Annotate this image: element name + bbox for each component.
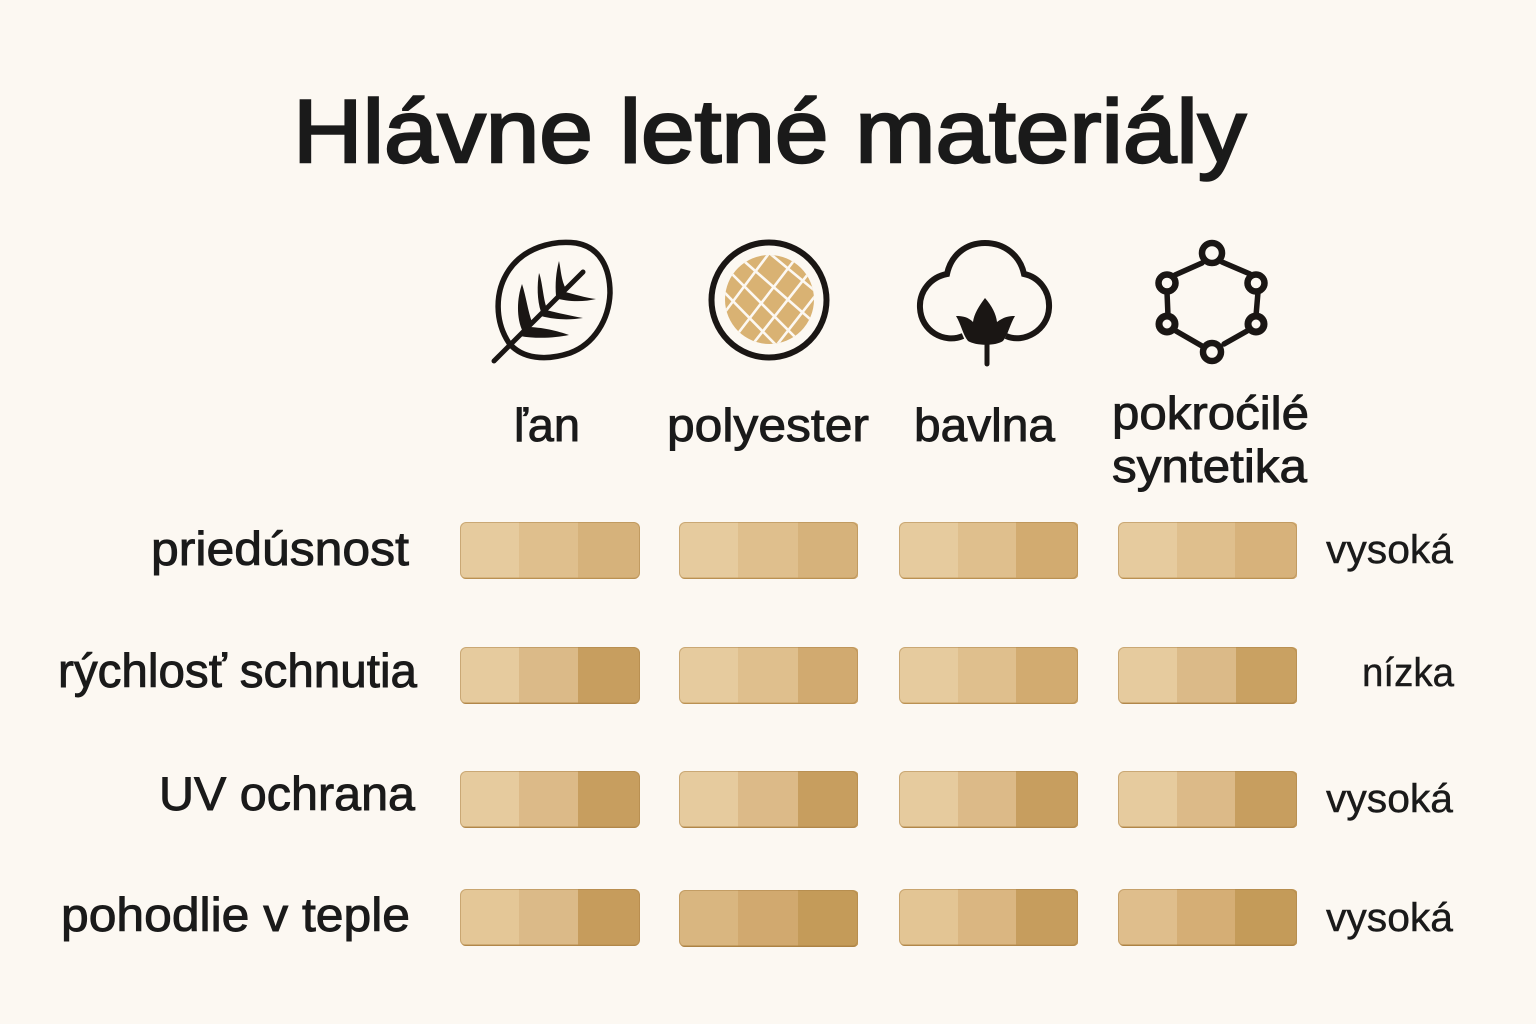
bar: bavlna rýchlosť schnutia <box>899 647 1078 704</box>
bar: bavlna UV ochrana <box>899 771 1078 828</box>
icon: linen leaf <box>494 242 610 361</box>
bar: ľan UV ochrana <box>460 771 640 828</box>
icon: cotton <box>920 243 1049 364</box>
column label: pokročilé syntetika: pokroćilé <box>1112 387 1309 439</box>
column label: polyester: polyester <box>667 399 869 451</box>
column label: bavlna: bavlna <box>914 399 1055 451</box>
bar: polyester UV ochrana <box>679 771 858 828</box>
value label: vysoká: vysoká <box>1326 528 1454 572</box>
column label: ľan: ľan <box>514 399 580 451</box>
row label: UV ochrana: UV ochrana <box>159 767 416 820</box>
column label: pokročilé syntetika <box>1112 387 1309 492</box>
bar: polyester priedúsnosť <box>679 522 858 579</box>
row label: pohodlie v teple: pohodlie v teple <box>61 888 410 941</box>
bar: polyester rýchlosť schnutia <box>679 647 858 704</box>
bar: bavlna priedúsnosť <box>899 522 1078 579</box>
bar: syntetika rýchlosť schnutia <box>1118 647 1297 704</box>
bar: syntetika pohodlie v teple <box>1118 889 1297 946</box>
value label: vysoká: vysoká <box>1326 777 1454 821</box>
icon: polyester fabric <box>712 242 826 358</box>
bar: bavlna pohodlie v teple <box>899 889 1078 946</box>
bar: syntetika priedúsnosť <box>1118 522 1297 579</box>
value label: vysoká: vysoká <box>1326 896 1454 940</box>
row label: rýchlosť schnutia: rýchlosť schnutia <box>58 644 418 697</box>
bar: ľan priedúsnosť <box>460 522 640 579</box>
title: Hlávne letné materiály <box>293 81 1247 181</box>
bar: ľan rýchlosť schnutia <box>460 647 640 704</box>
icon: synthetic molecule <box>1158 243 1264 361</box>
bar: ľan pohodlie v teple <box>460 889 640 946</box>
bar: polyester pohodlie v teple <box>679 890 858 947</box>
column label: pokročilé syntetika: syntetika <box>1112 440 1307 492</box>
row label: priedúsnosť: priedúsnost <box>151 522 409 575</box>
bar: syntetika UV ochrana <box>1118 771 1297 828</box>
value label: nízka: nízka <box>1362 651 1455 695</box>
